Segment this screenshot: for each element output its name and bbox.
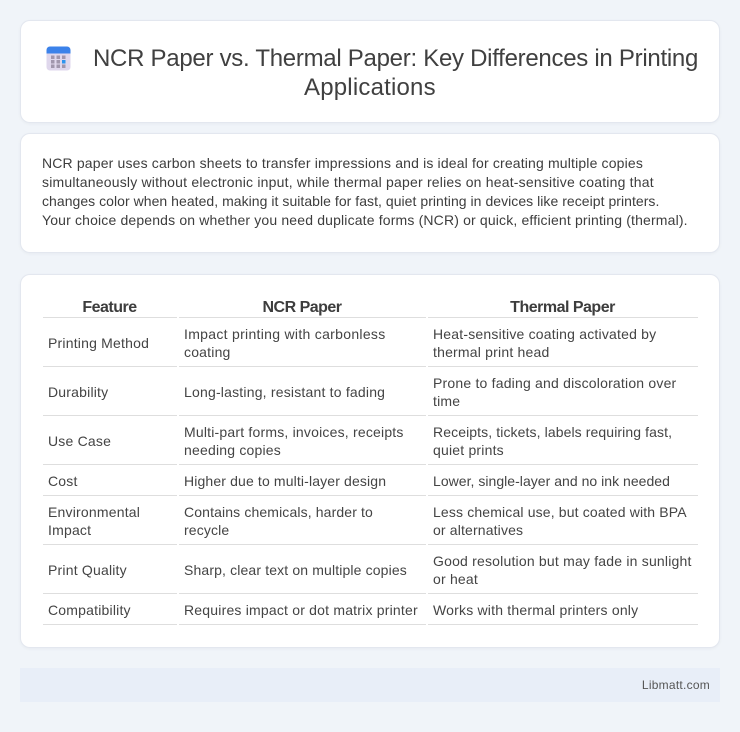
- row: printing method: Impact printing with carbonless: [184, 326, 386, 342]
- row: environmental impact: or alternatives: [433, 522, 523, 538]
- intro paragraph: changes color when heated, making it suitable for fast, quiet printing in devices like receipt printers.: [42, 193, 659, 209]
- row: compatibility: [48, 602, 638, 618]
- row: printing method: thermal print head: [433, 344, 549, 360]
- row: environmental impact: Impact: [48, 522, 91, 538]
- table header row: Thermal Paper: [510, 299, 615, 316]
- row: use case: quiet prints: [433, 442, 504, 458]
- row: cost: Lower, single-layer and no ink needed: [433, 473, 670, 489]
- panel: header: [20, 20, 720, 123]
- row: use case: needing copies: [184, 442, 281, 458]
- row: print quality: [48, 553, 692, 587]
- row: cost: [48, 473, 670, 489]
- title: NCR Paper vs. Thermal Paper: Key Differences in Printing: [93, 45, 698, 72]
- row: environmental impact: Contains chemicals, harder to: [184, 504, 373, 520]
- footer bar: [20, 668, 720, 702]
- row: environmental impact: [48, 504, 687, 538]
- panel: comparison table: [20, 274, 720, 648]
- panel: intro text: [20, 133, 720, 253]
- row: use case: Use Case: [48, 433, 111, 449]
- table header row: Feature: [82, 299, 137, 316]
- intro paragraph: simultaneously without electronic input, while thermal paper relies on heat-sensitive coating that: [42, 174, 654, 190]
- intro paragraph: [42, 155, 688, 228]
- row: printing method: [48, 326, 656, 360]
- row: cost: Higher due to multi-layer design: [184, 473, 386, 489]
- intro paragraph: NCR paper uses carbon sheets to transfer impressions and is ideal for creating multiple copies: [42, 155, 643, 171]
- table header row: [82, 299, 616, 316]
- intro paragraph: Your choice depends on whether you need duplicate forms (NCR) or quick, efficient printing (thermal).: [42, 212, 688, 228]
- row: print quality: Good resolution but may fade in sunlight: [433, 553, 692, 569]
- row: print quality: Print Quality: [48, 562, 127, 578]
- row: use case: Multi-part forms, invoices, receipts: [184, 424, 404, 440]
- row: compatibility: Compatibility: [48, 602, 131, 618]
- row: compatibility: Works with thermal printers only: [433, 602, 638, 618]
- row: print quality: or heat: [433, 571, 478, 587]
- row: use case: Receipts, tickets, labels requiring fast,: [433, 424, 672, 440]
- footer credit: Libmatt.com: [642, 678, 710, 692]
- row: durability: Prone to fading and discoloration over: [433, 375, 676, 391]
- row: environmental impact: Less chemical use, but coated with BPA: [433, 504, 687, 520]
- row: use case: [48, 424, 672, 458]
- title: Applications: [304, 74, 436, 101]
- row: durability: time: [433, 393, 460, 409]
- row: durability: Durability: [48, 384, 108, 400]
- title: [93, 45, 698, 101]
- table header row: NCR Paper: [262, 299, 342, 316]
- row: printing method: coating: [184, 344, 231, 360]
- row: environmental impact: recycle: [184, 522, 229, 538]
- row: print quality: Sharp, clear text on multiple copies: [184, 562, 407, 578]
- row: cost: Cost: [48, 473, 78, 489]
- icon: calendar grid: [46, 46, 70, 70]
- row: durability: [48, 375, 676, 409]
- row: durability: Long-lasting, resistant to fading: [184, 384, 385, 400]
- row: environmental impact: Environmental: [48, 504, 140, 520]
- row: compatibility: Requires impact or dot matrix printer: [184, 602, 418, 618]
- row: printing method: Printing Method: [48, 335, 149, 351]
- row: printing method: Heat-sensitive coating activated by: [433, 326, 656, 342]
